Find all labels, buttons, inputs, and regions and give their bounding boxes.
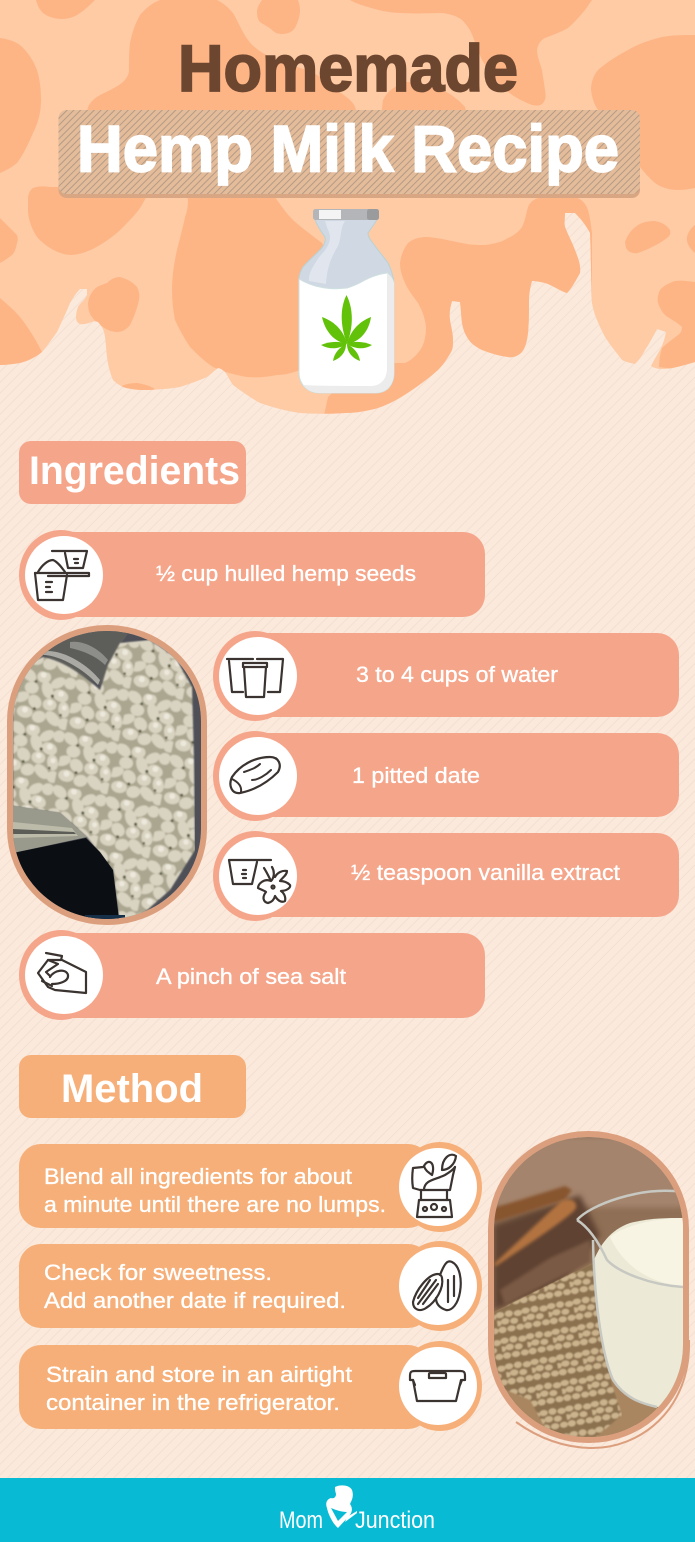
title band: Hemp Milk Recipe: Hemp Milk Recipe <box>77 112 619 186</box>
step 1: blend: a minute until there are no lumps. <box>44 1192 386 1217</box>
icon: blender <box>412 1155 456 1217</box>
step 2: sweetness <box>19 1241 482 1331</box>
ingredient: vanilla extract: ½ teaspoon vanilla extract <box>351 860 620 885</box>
logo: MomJunction <box>279 1485 435 1534</box>
icon: airtight container <box>410 1371 465 1401</box>
logo: MomJunction: Mom <box>279 1507 323 1534</box>
step 3: store: Strain and store in an airtight <box>46 1362 352 1387</box>
step 2: sweetness: Add another date if required. <box>44 1288 346 1313</box>
ingredient: sea salt <box>19 930 485 1020</box>
icon: dates <box>413 1261 461 1310</box>
ingredient: vanilla extract <box>213 831 679 921</box>
step 2: sweetness: Check for sweetness. <box>44 1260 272 1285</box>
heading: Ingredients <box>19 441 246 504</box>
icon: cups of water <box>227 659 283 697</box>
ingredient: date: 1 pitted date <box>352 763 480 788</box>
step 1: blend: Blend all ingredients for about <box>44 1164 352 1189</box>
heading: Method <box>19 1055 246 1118</box>
icon: spoon and vanilla flower <box>229 860 290 903</box>
ingredient: water <box>213 631 679 721</box>
ingredient: sea salt: A pinch of sea salt <box>156 964 346 989</box>
icon: date fruit <box>230 757 280 793</box>
photo: hulled hemp seeds <box>10 628 204 925</box>
icon: pinching hand <box>38 953 86 993</box>
photo: hemp milk jug and seeds <box>491 1134 689 1448</box>
step 1: blend <box>19 1142 482 1232</box>
icon: milk bottle with hemp leaf <box>299 209 394 393</box>
icon: measuring cups <box>35 551 89 600</box>
step 3: store: container in the refrigerator. <box>46 1390 340 1415</box>
heading: Method: Method <box>61 1067 203 1111</box>
heading: Ingredients: Ingredients <box>29 449 240 493</box>
ingredient: water: 3 to 4 cups of water <box>356 662 558 687</box>
ingredient: date <box>213 731 679 821</box>
header milk splash background <box>0 0 695 420</box>
hemp leaf <box>321 295 372 361</box>
footer bar <box>0 1478 695 1542</box>
step 3: store <box>19 1341 482 1431</box>
logo: MomJunction: Junction <box>355 1507 435 1534</box>
ingredient: hemp seeds <box>19 530 485 620</box>
ingredient: hemp seeds: ½ cup hulled hemp seeds <box>156 561 416 586</box>
title: Homemade: Homemade <box>178 31 518 105</box>
